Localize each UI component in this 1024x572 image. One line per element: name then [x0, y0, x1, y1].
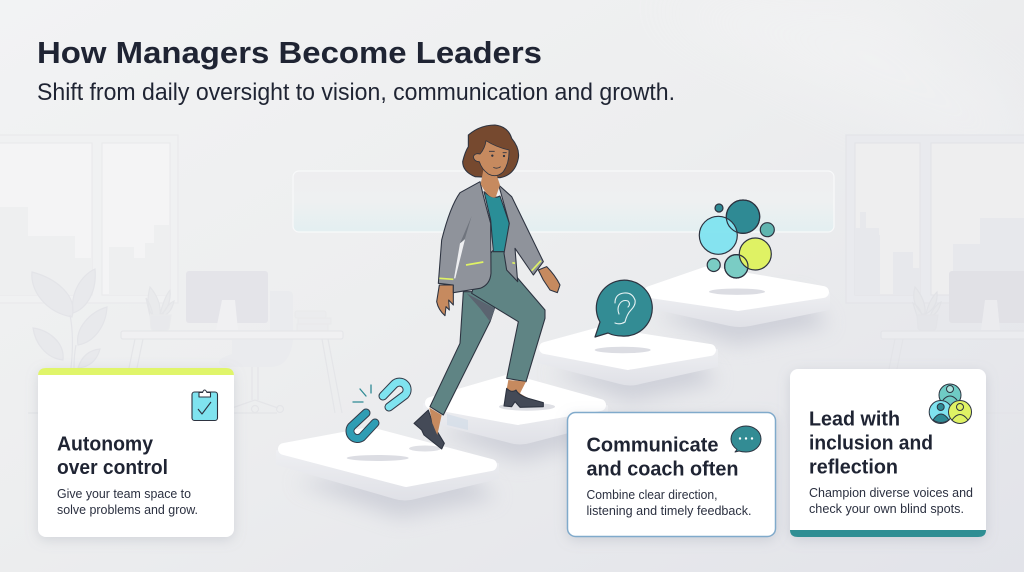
card heading: Autonomy	[57, 434, 154, 456]
right hand	[538, 267, 560, 293]
icon: ear speech bubble	[595, 280, 652, 337]
card: lead with inclusion and reflection: inclusion and	[809, 432, 933, 454]
top	[484, 192, 509, 252]
front foot	[507, 380, 528, 398]
card heading: Lead with	[809, 408, 900, 430]
step 2 platform	[424, 380, 608, 462]
arm gap	[454, 239, 465, 278]
card heading: Communicate	[586, 434, 718, 456]
card: lead with inclusion and reflection: reflection	[809, 456, 898, 478]
left hand	[437, 285, 453, 316]
front shoe	[504, 388, 543, 407]
face	[473, 141, 509, 176]
step 1 platform	[277, 433, 498, 518]
icon: broken chain link	[350, 382, 407, 439]
card: autonomy over control	[38, 368, 234, 537]
card body: Give your team space to	[57, 487, 191, 501]
card: autonomy over control: solve problems and grow.	[57, 503, 198, 517]
icon: clipboard	[192, 390, 218, 420]
card: lead with inclusion and reflection	[790, 369, 986, 537]
front leg	[472, 250, 545, 382]
jacket accents	[439, 261, 541, 279]
glass panel	[293, 171, 834, 232]
right office scene	[846, 135, 1024, 413]
card: autonomy over control: over control	[57, 457, 168, 479]
left office scene	[0, 135, 343, 413]
card body: Champion diverse voices and	[809, 486, 973, 500]
card accent bar	[38, 368, 234, 376]
icon: chat bubble	[731, 426, 761, 452]
title: How Managers Become Leaders	[37, 35, 542, 70]
back shoe	[414, 410, 444, 449]
card: lead with inclusion and reflection: check your own blind spots.	[809, 502, 964, 516]
card: communicate and coach often: and coach often	[586, 458, 738, 480]
leg shadow	[467, 293, 495, 322]
back foot	[429, 408, 442, 435]
card: communicate and coach often	[568, 412, 776, 536]
card accent bar	[790, 530, 986, 537]
card body: Combine clear direction,	[586, 488, 718, 502]
face details	[489, 151, 507, 168]
icon: people circles	[929, 384, 972, 424]
hair	[463, 125, 519, 178]
step 3 platform	[538, 333, 718, 402]
figure: woman climbing steps	[414, 125, 560, 449]
back leg	[430, 292, 495, 415]
card: communicate and coach often: listening and timely feedback.	[586, 504, 752, 518]
neck	[481, 170, 500, 198]
right jacket side	[499, 185, 543, 282]
subtitle: Shift from daily oversight to vision, communication and growth.	[37, 79, 675, 106]
left jacket side	[438, 182, 491, 293]
icon: cluster of circles	[699, 200, 774, 278]
step 4 platform	[644, 272, 830, 345]
arm shadow	[460, 216, 472, 243]
